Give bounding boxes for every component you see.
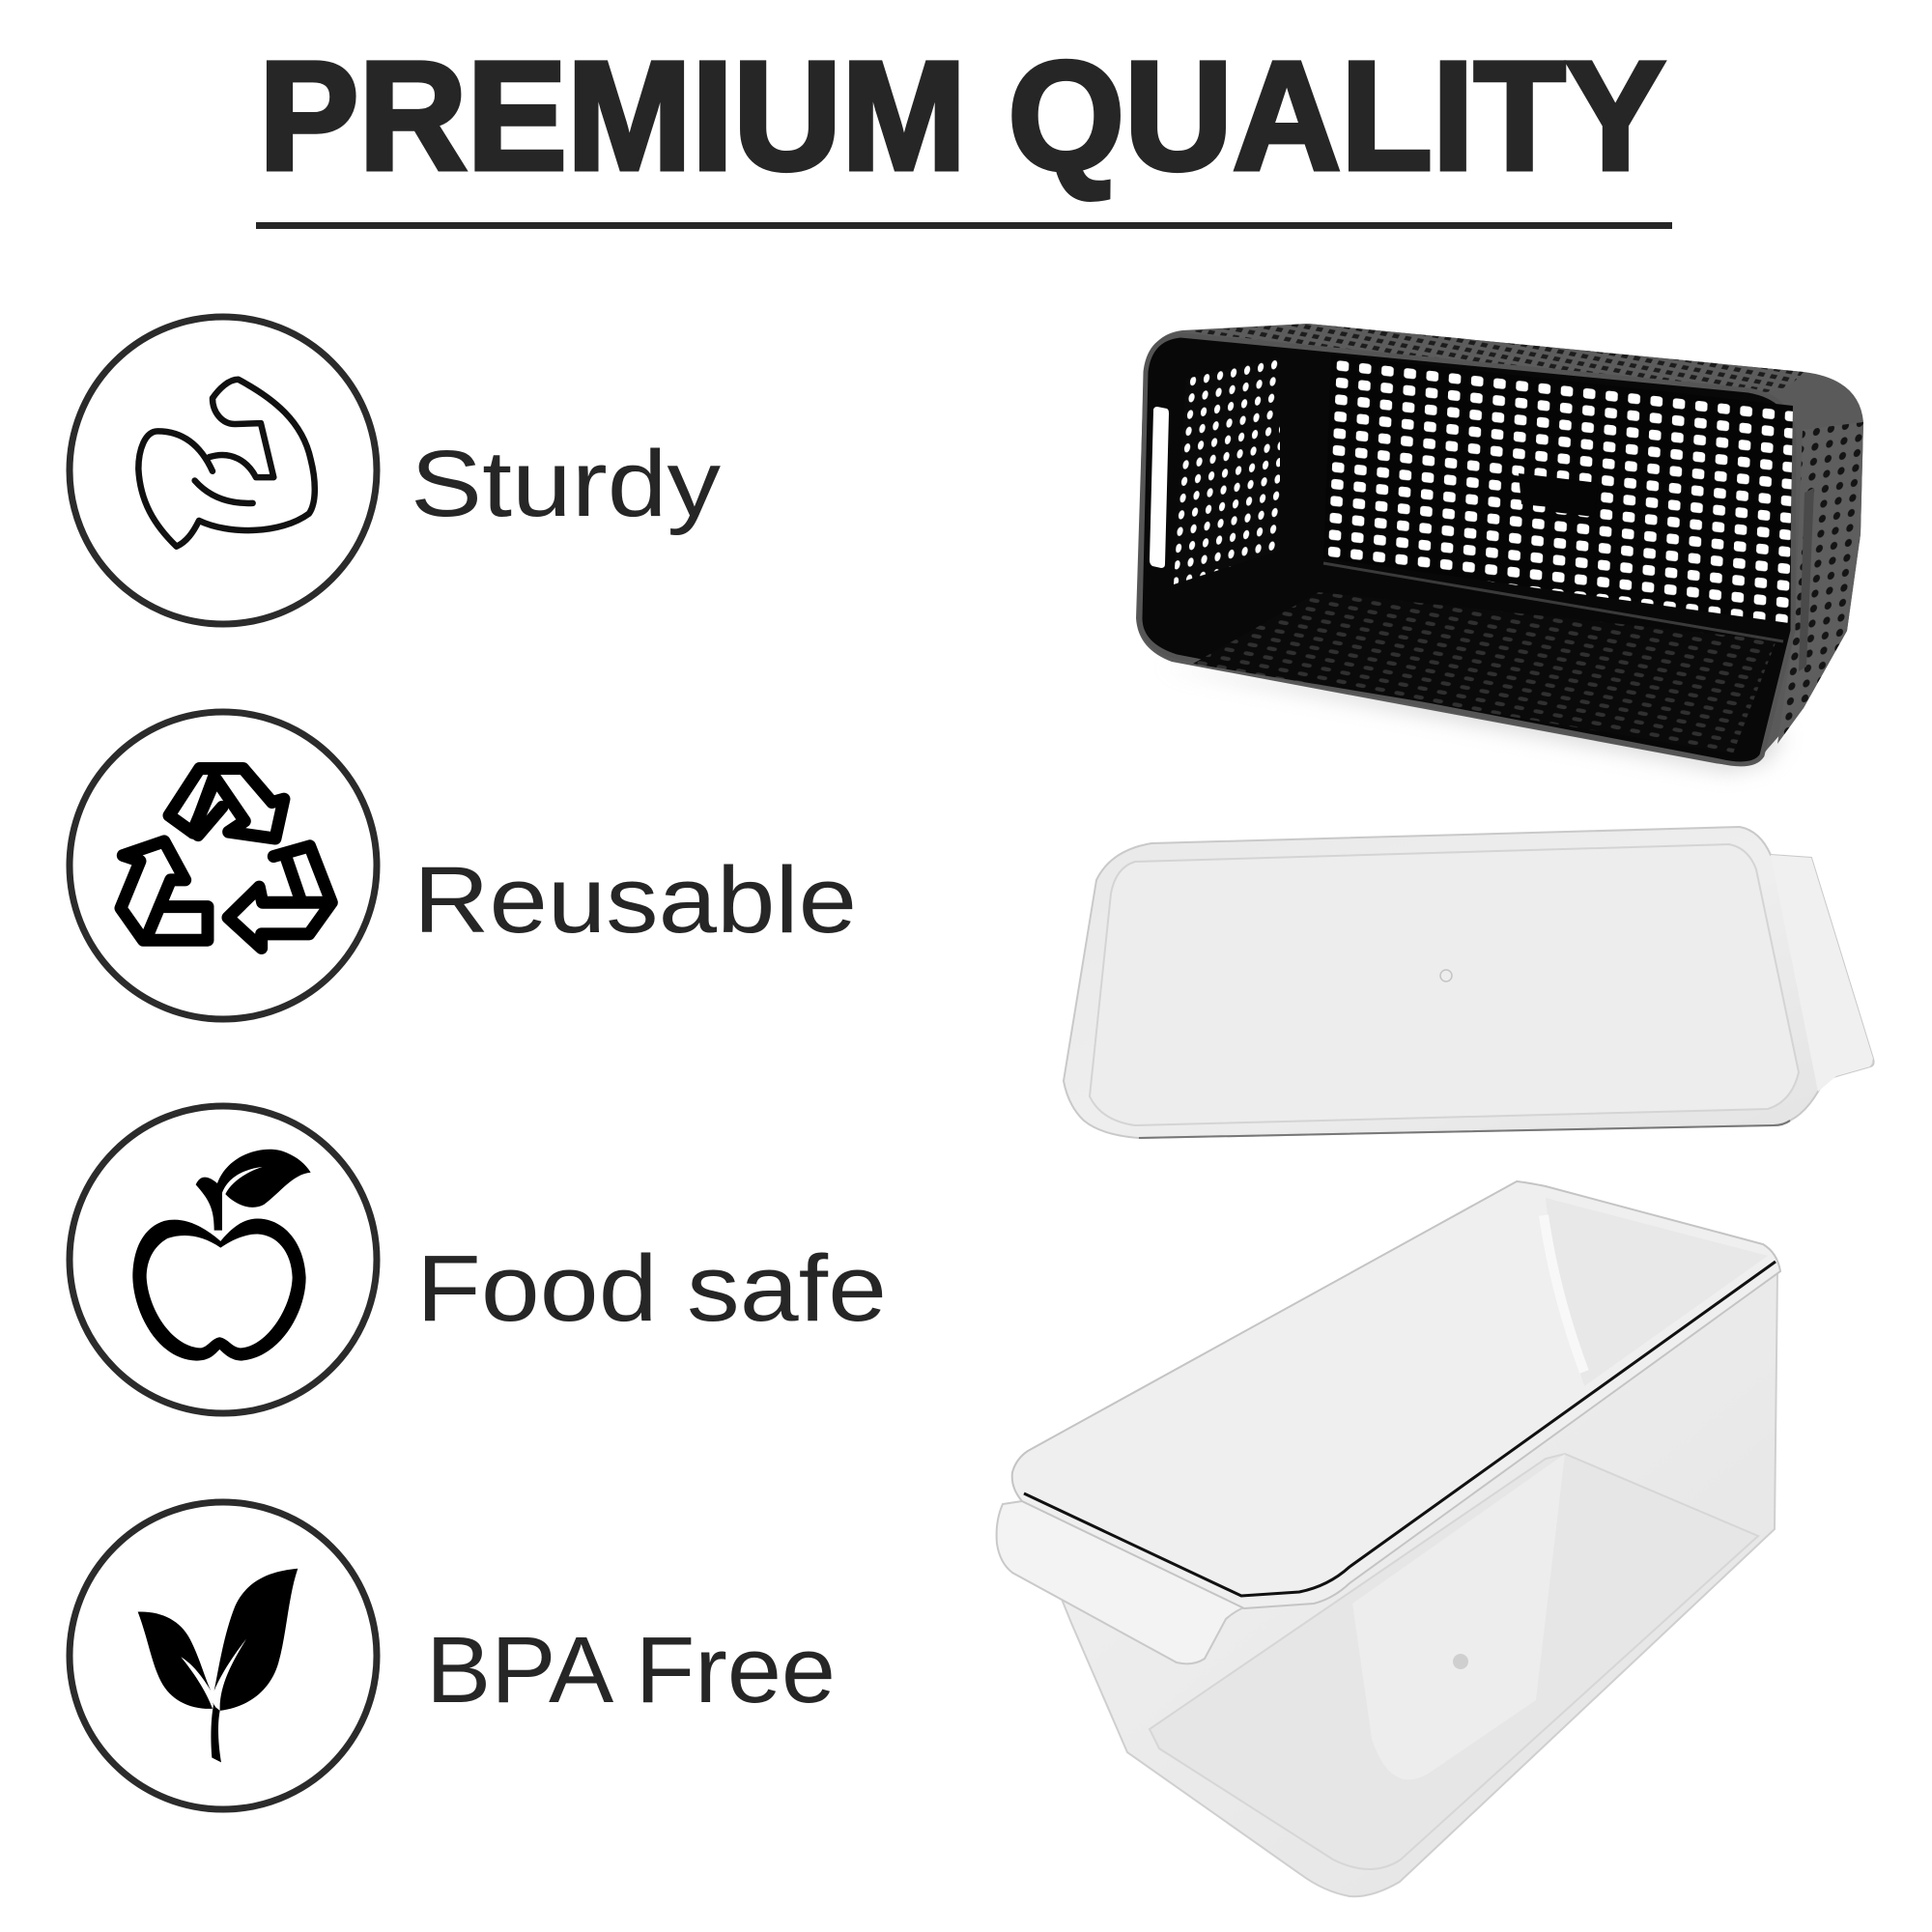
icon ring: reusable [70, 712, 377, 1019]
title underline [256, 222, 1672, 229]
feature: bpa free [70, 1502, 836, 1809]
icon: apple with leaf [132, 1150, 311, 1361]
label: sturdy: Sturdy [411, 431, 722, 536]
label: bpa free: BPA Free [426, 1617, 836, 1722]
icon: sprout leaves [138, 1569, 298, 1762]
label: reusable: Reusable [413, 847, 857, 952]
label: food safe: Food safe [416, 1236, 887, 1341]
feature: sturdy [70, 317, 722, 624]
icon: flexed arm [138, 380, 315, 547]
icon: recycle arrows [121, 768, 331, 948]
product: dark perforated basket [1136, 324, 1863, 773]
icon ring: bpa free [70, 1502, 377, 1809]
feature: food safe [70, 1106, 887, 1413]
feature: reusable [70, 712, 857, 1019]
product: clear storage bin [997, 1181, 1780, 1896]
icon ring: food safe [70, 1106, 377, 1413]
product: clear lid [1064, 827, 1874, 1138]
title: PREMIUM QUALITY [259, 29, 1665, 202]
icon ring: sturdy [70, 317, 377, 624]
